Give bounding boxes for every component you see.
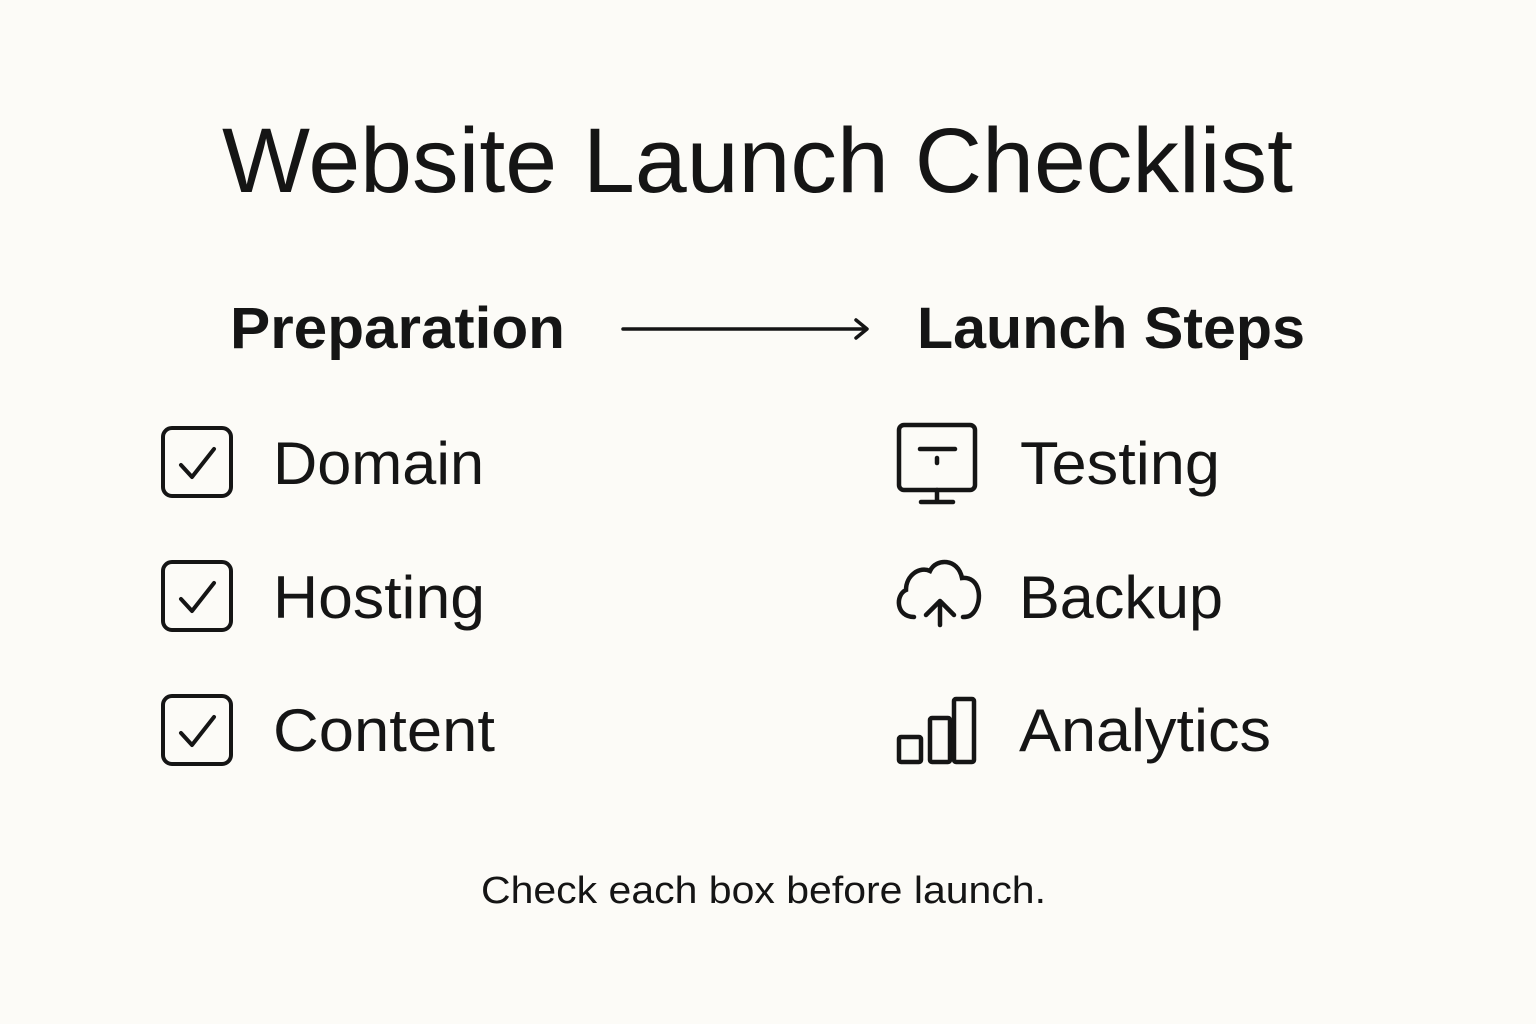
item: backup: Backup — [1019, 564, 1223, 631]
item: hosting: Hosting — [273, 564, 485, 631]
footer note: Check each box before launch. — [481, 870, 1046, 912]
arrow — [623, 320, 867, 338]
item: domain: Domain — [273, 430, 484, 497]
item: analytics — [899, 697, 1271, 764]
item: domain — [163, 428, 484, 497]
item: hosting — [163, 562, 485, 631]
item: backup — [899, 562, 1223, 631]
item: content — [163, 696, 495, 764]
title: Website Launch Checklist — [222, 110, 1293, 212]
heading: preparation: Preparation — [230, 296, 565, 361]
item: analytics: Analytics — [1019, 697, 1271, 764]
item: testing: Testing — [1020, 430, 1220, 497]
item: content: Content — [273, 697, 495, 764]
heading: launch steps: Launch Steps — [917, 296, 1305, 361]
item: testing — [899, 425, 1220, 502]
